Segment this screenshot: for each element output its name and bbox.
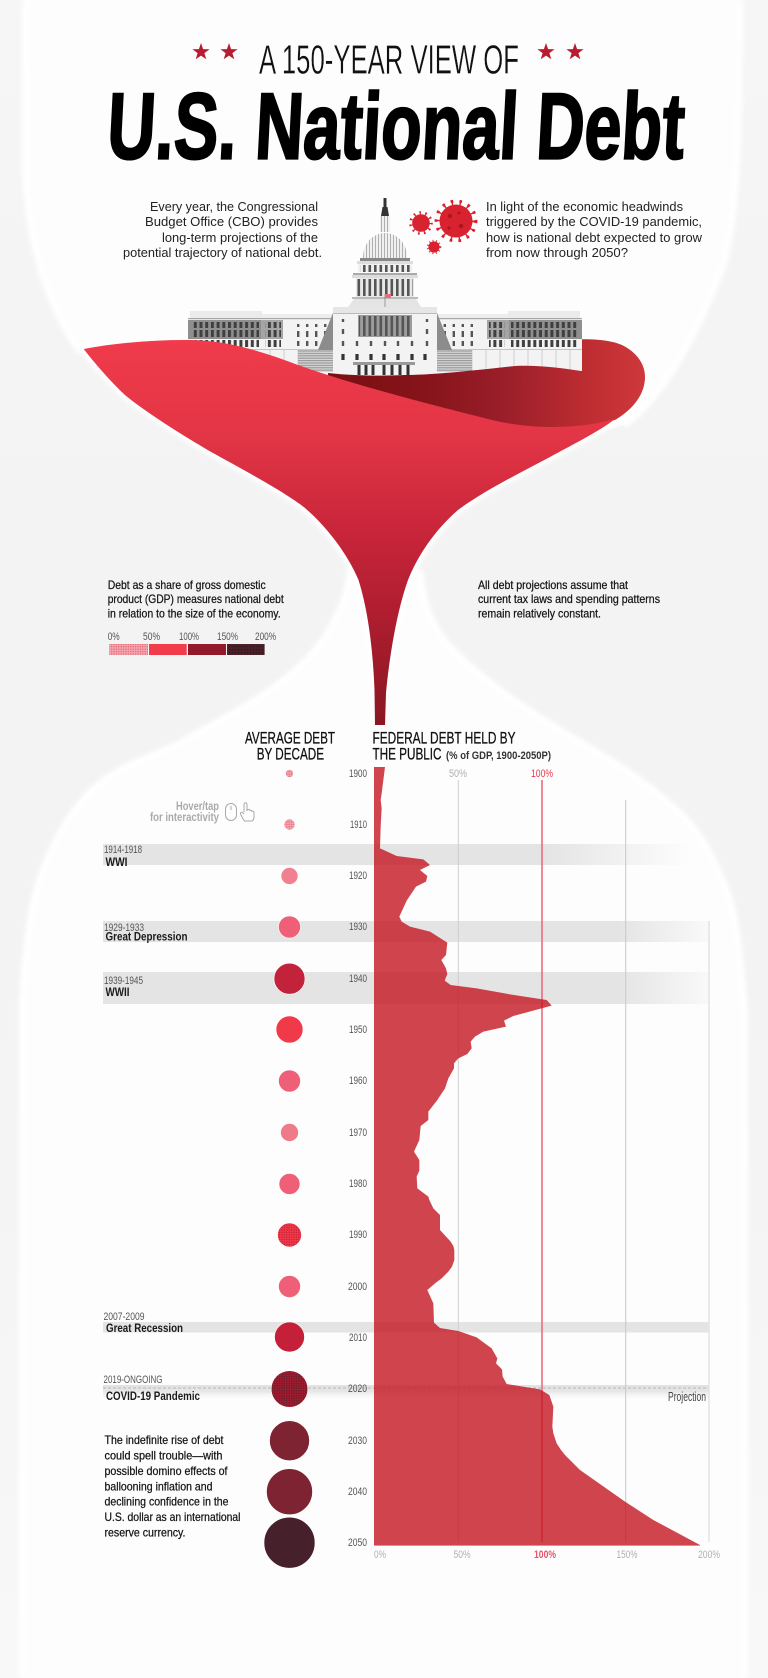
event label: WWI: 1914-1918 (104, 844, 142, 856)
text block: pandemic question: from now through 2050? (486, 245, 628, 260)
year axis labels: 1960 (349, 1075, 367, 1087)
event bands (103, 844, 709, 1401)
text block: rise of debt warning: could spell trouble—with (104, 1448, 222, 1462)
hover hint text (150, 799, 219, 824)
year axis labels: 1970 (349, 1127, 367, 1139)
event label: WWI (104, 844, 142, 869)
heading: federal debt held by the public (372, 728, 551, 764)
event label: Great Depression: 1929-1933 (104, 922, 144, 934)
heading: federal debt held by the public: (% of GDP, 1900-2050P) (446, 750, 551, 762)
event label: COVID-19 Pandemic: COVID-19 Pandemic (106, 1391, 201, 1403)
bottom axis labels: 100% (534, 1549, 556, 1561)
funnel middle wave (328, 366, 640, 440)
year axis labels: 1950 (349, 1024, 367, 1036)
year axis labels: 1930 (349, 921, 367, 933)
year axis labels (348, 768, 367, 1549)
text block: pandemic question: how is national debt expected to grow (486, 230, 703, 245)
event label: Great Depression (104, 922, 188, 944)
dome (348, 198, 421, 307)
event label: WWI: WWI (106, 857, 128, 869)
legend: share of GDP scale: 150% (217, 631, 238, 643)
icon: stars right (537, 43, 584, 59)
top axis labels (449, 768, 553, 780)
heading: federal debt held by the public: FEDERAL DEBT HELD BY (372, 728, 516, 748)
year axis labels: 1910 (350, 819, 367, 831)
right wing (437, 311, 582, 376)
year axis labels: 2000 (348, 1281, 367, 1293)
legend: share of GDP scale: 0% (108, 631, 120, 643)
text block: rise of debt warning: reserve currency. (104, 1526, 186, 1540)
event label: WWII: 1939-1945 (104, 975, 143, 987)
hover hint text: for interactivity (150, 810, 219, 824)
year axis labels: 2020 (348, 1383, 367, 1395)
text block: pandemic question (486, 199, 703, 260)
event label: Great Recession (104, 1311, 183, 1335)
text block: pandemic question: triggered by the COVID-19 pandemic, (486, 214, 702, 229)
text block: CBO intro: Every year, the Congressional (150, 199, 318, 214)
bottom axis labels (374, 1549, 720, 1561)
bottom axis labels: 50% (454, 1549, 471, 1561)
year axis labels: 1980 (349, 1178, 367, 1190)
text block: rise of debt warning: ballooning inflation and (104, 1480, 212, 1494)
text block: projection assumption (478, 578, 660, 620)
bottom axis labels: 0% (374, 1549, 386, 1561)
text block: rise of debt warning: U.S. dollar as an international (104, 1510, 240, 1524)
area chart: federal debt as percent of GDP (374, 767, 700, 1546)
left wing (188, 311, 333, 376)
year axis labels: 2050 (348, 1537, 367, 1549)
legend: share of GDP scale: 100% (179, 631, 199, 643)
icon: stars left (192, 43, 238, 59)
text block: projection assumption: All debt projections assume that (478, 578, 629, 592)
funnel: red debt shape (84, 340, 615, 725)
heading: average debt by decade: BY DECADE (257, 744, 324, 764)
text block: rise of debt warning: possible domino effects of (104, 1464, 228, 1478)
bubble chart: average debt by decade (264, 770, 315, 1568)
event label: Great Recession: 2007-2009 (104, 1311, 144, 1323)
year axis labels: 1920 (349, 870, 367, 882)
projection label: Projection (668, 1390, 706, 1404)
text block: CBO intro: Budget Office (CBO) provides (145, 214, 318, 229)
text block: GDP explanation: Debt as a share of gross domestic (108, 578, 266, 592)
year axis labels: 2010 (349, 1332, 367, 1344)
event label: COVID-19 Pandemic (104, 1374, 201, 1403)
text block: rise of debt warning: declining confidence in the (104, 1494, 229, 1508)
year axis labels: 1990 (349, 1229, 367, 1241)
event label: WWII: WWII (106, 987, 130, 999)
chart gridlines (458, 780, 709, 1542)
event label: Great Recession: Great Recession (106, 1323, 183, 1335)
legend: share of GDP scale: 50% (143, 631, 160, 643)
heading: federal debt held by the public: THE PUBLIC (372, 744, 442, 764)
year axis labels: 1900 (349, 768, 367, 780)
text block: rise of debt warning: The indefinite rise of debt (104, 1433, 224, 1447)
heading: average debt by decade (245, 728, 335, 764)
year axis labels: 2040 (348, 1486, 367, 1498)
text block: GDP explanation: in relation to the size of the economy. (108, 606, 281, 620)
title line: a 150-year view of: A 150-YEAR VIEW OF (259, 36, 519, 82)
heading: average debt by decade: AVERAGE DEBT (245, 728, 335, 748)
text block: rise of debt warning (104, 1433, 240, 1540)
text block: projection assumption: current tax laws and spending patterns (478, 592, 660, 606)
year axis labels: 2030 (348, 1435, 367, 1447)
legend: share of GDP scale (108, 631, 276, 655)
text block: GDP explanation (108, 578, 284, 620)
icon: pointing hand (240, 803, 254, 821)
bottom axis labels: 150% (616, 1549, 638, 1561)
funnel back lobe (560, 339, 645, 430)
event label: Great Depression: Great Depression (106, 932, 188, 944)
title (105, 36, 687, 178)
icon: coronavirus particles (410, 201, 476, 253)
top axis labels: 50% (449, 768, 467, 780)
icon: mouse (226, 804, 236, 820)
legend: share of GDP scale: 200% (255, 631, 276, 643)
text block: CBO intro: long-term projections of the (162, 230, 318, 245)
event label: WWII (104, 975, 143, 999)
year axis labels: 1940 (349, 973, 367, 985)
text block: pandemic question: In light of the economic headwinds (486, 199, 683, 214)
hover hint text: Hover/tap (176, 799, 219, 813)
illustration: capitol building (188, 198, 582, 376)
top axis labels: 100% (531, 768, 553, 780)
central block (333, 307, 437, 376)
text block: projection assumption: remain relatively constant. (478, 606, 601, 620)
bottom axis labels: 200% (698, 1549, 720, 1561)
text block: GDP explanation: product (GDP) measures national debt (108, 592, 284, 606)
text block: CBO intro (123, 199, 322, 260)
text block: CBO intro: potential trajectory of national debt. (123, 245, 322, 260)
event label: COVID-19 Pandemic: 2019-ONGOING (104, 1374, 162, 1386)
